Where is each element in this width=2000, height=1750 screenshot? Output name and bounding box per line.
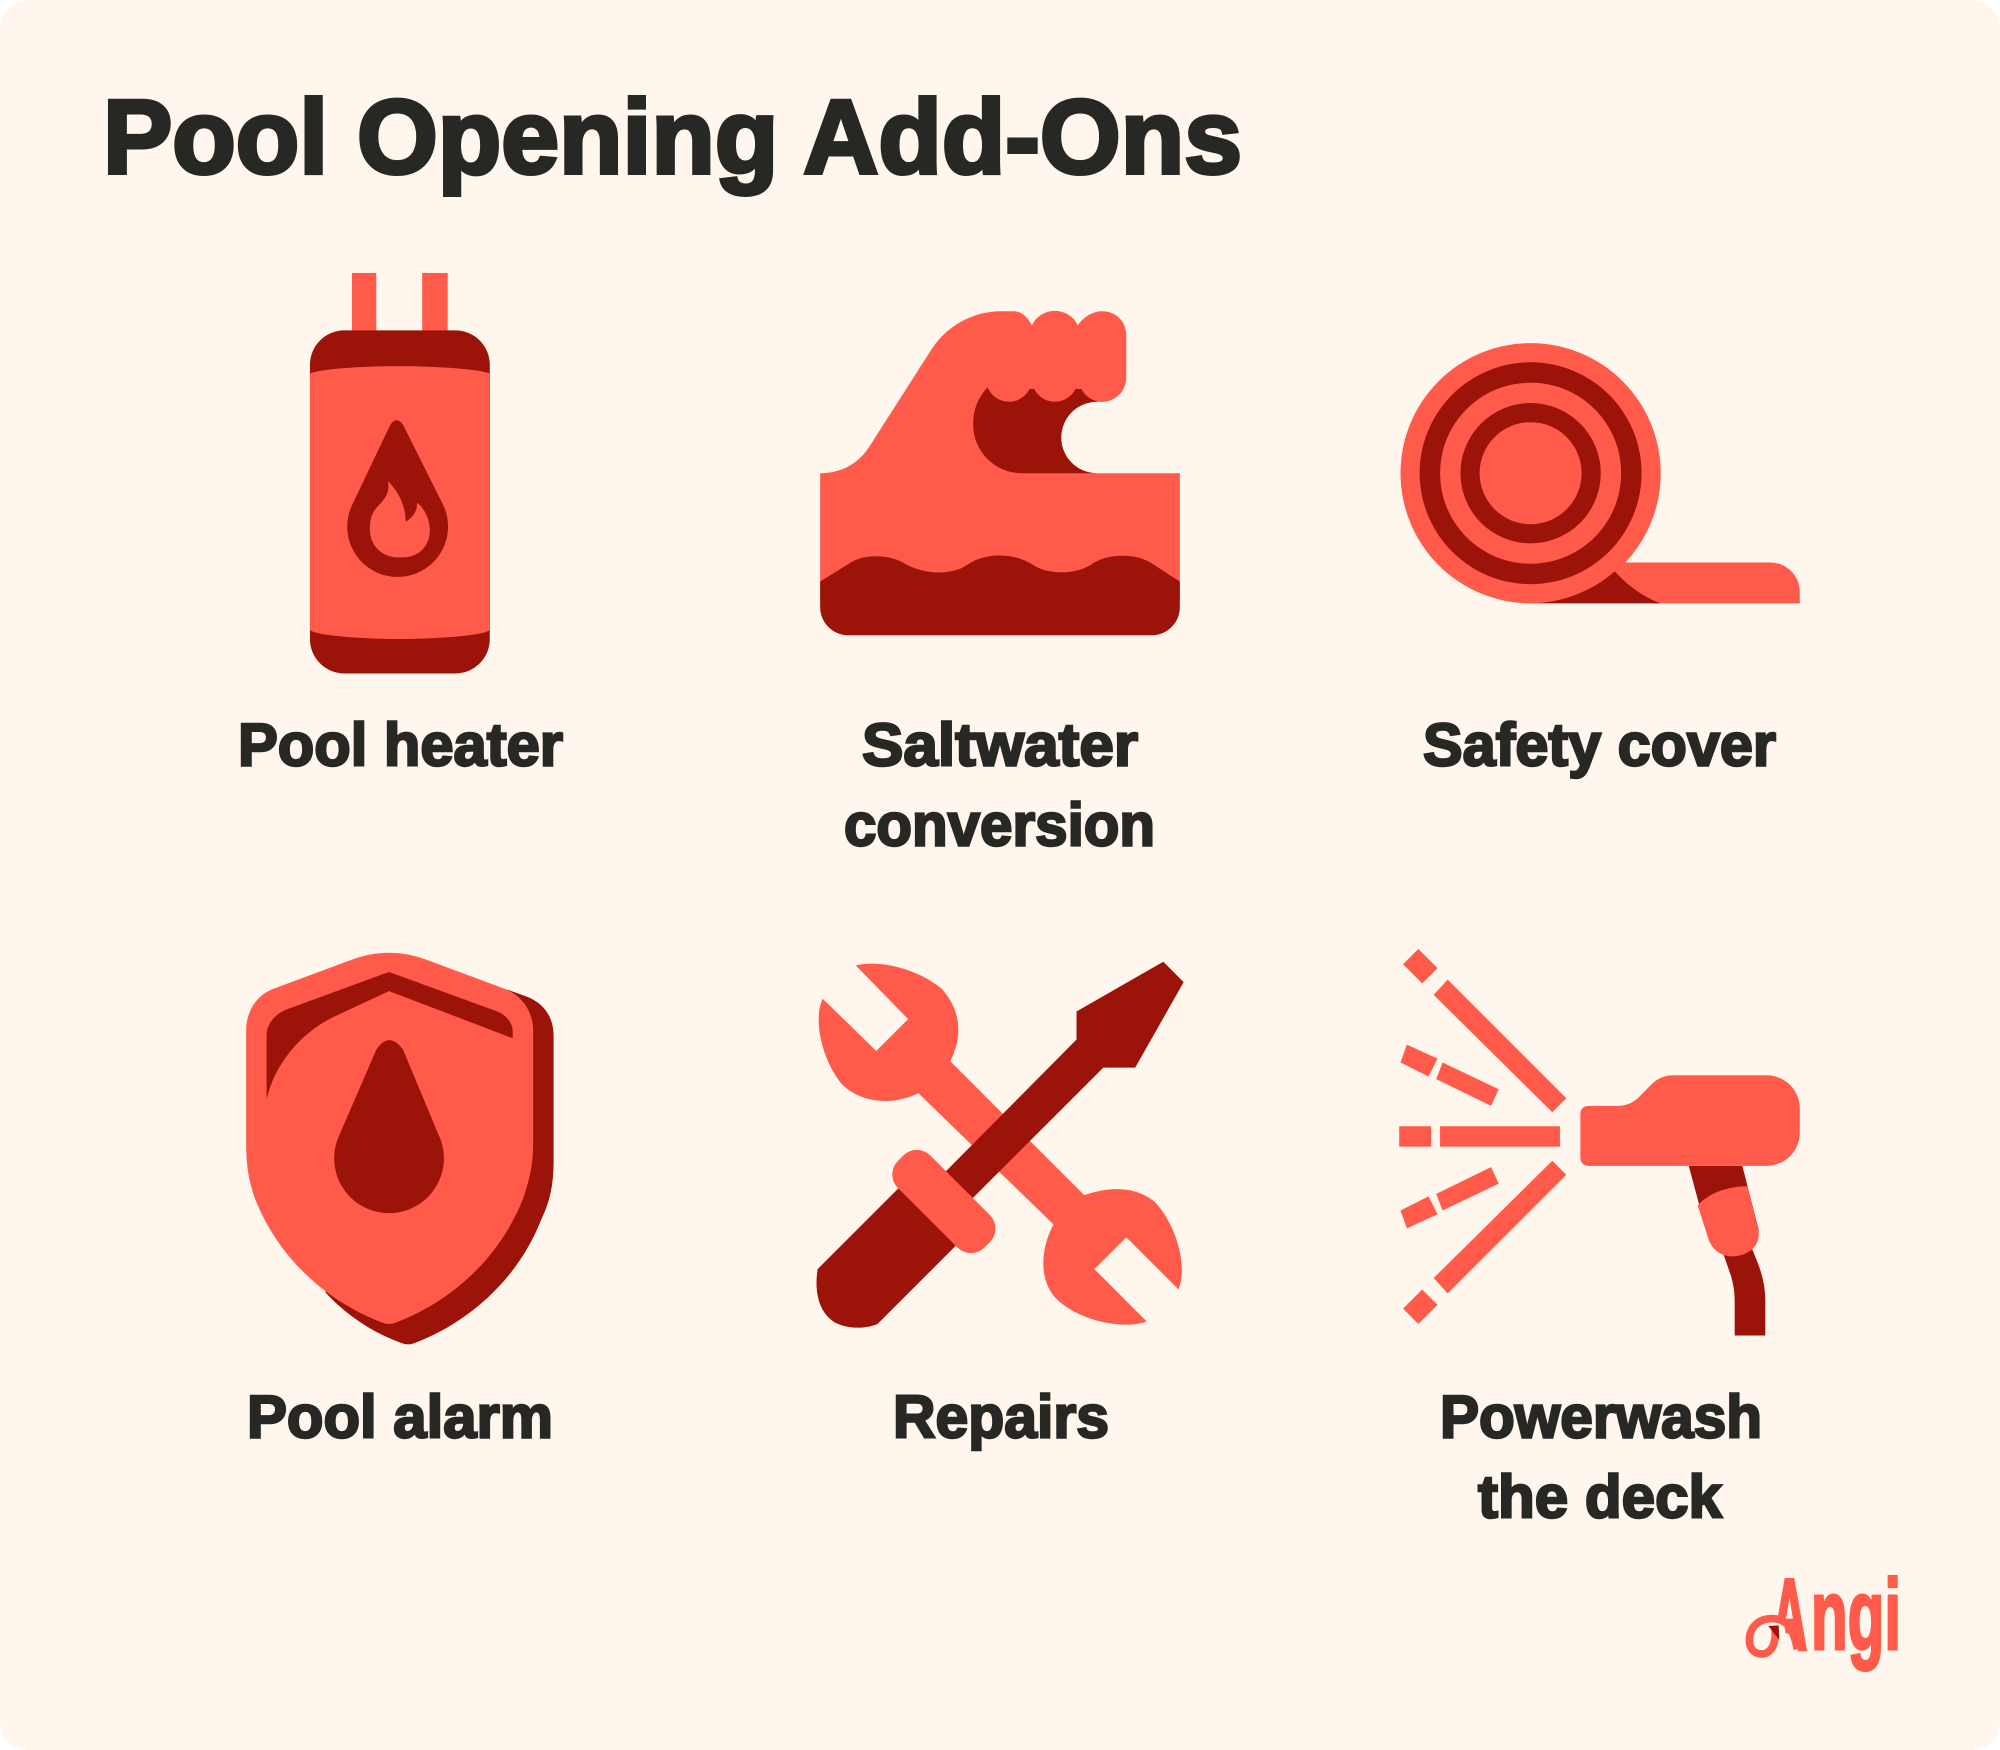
label: pool heater: Pool heater xyxy=(238,712,563,778)
title: Pool Opening Add-Ons xyxy=(103,79,1242,196)
icon: pool heater xyxy=(310,273,490,673)
logo: Angi xyxy=(1746,1575,1898,1672)
icon: saltwater wave xyxy=(820,311,1180,635)
icon: repairs wrench and screwdriver xyxy=(817,962,1184,1328)
icon: powerwash sprayer xyxy=(1399,949,1800,1335)
icon: pool alarm shield xyxy=(246,953,554,1344)
label: saltwater conversion: conversion xyxy=(844,792,1155,858)
logo: Angi: A xyxy=(1772,1559,1807,1671)
label: powerwash the deck: Powerwash xyxy=(1440,1384,1762,1450)
logo: Angi: ngi xyxy=(1811,1559,1901,1671)
label: repairs: Repairs xyxy=(893,1384,1109,1450)
icon: safety cover roll xyxy=(1401,343,1800,603)
label: powerwash the deck xyxy=(1440,1384,1762,1530)
label: powerwash the deck: the deck xyxy=(1478,1464,1723,1530)
label: saltwater conversion: Saltwater xyxy=(862,712,1138,778)
label: safety cover: Safety cover xyxy=(1423,712,1776,778)
label: saltwater conversion xyxy=(844,712,1155,858)
label: pool alarm: Pool alarm xyxy=(247,1384,553,1450)
